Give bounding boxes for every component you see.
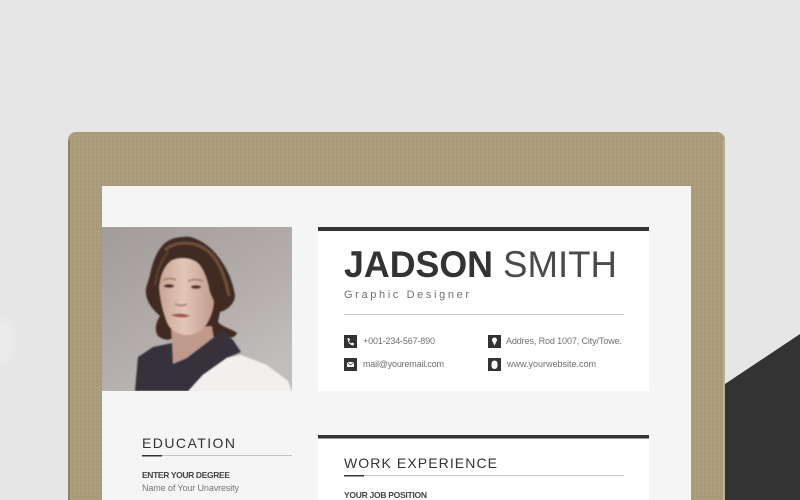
name [344, 243, 617, 285]
name: JADSON [344, 243, 493, 285]
header card [318, 227, 649, 391]
university: Name of Your Unavresity [142, 483, 240, 493]
scarf [135, 330, 241, 391]
eyes, nose and mouth [163, 278, 203, 317]
contact: email: mail@youremail.com [363, 359, 444, 369]
face [159, 258, 214, 335]
contact: address: Addres, Rod 1007, City/Towe. [506, 336, 622, 346]
work experience card [318, 435, 649, 500]
resume mockup scene [68, 132, 800, 500]
education section [142, 435, 292, 493]
neck [171, 326, 214, 364]
contact: address [488, 335, 622, 348]
shirt [188, 355, 292, 392]
resume paper [102, 186, 691, 500]
job title: Graphic Designer [344, 289, 469, 301]
contact: website [488, 358, 596, 371]
board [68, 132, 725, 500]
job position: YOUR JOB POSITION [344, 490, 427, 500]
portrait photo [102, 227, 292, 392]
hair [146, 237, 237, 340]
contact: email [344, 358, 444, 371]
contact: website: www.yourwebsite.com [506, 359, 596, 369]
contact: phone [344, 335, 435, 348]
education heading: EDUCATION [142, 435, 235, 451]
degree: ENTER YOUR DEGREE [142, 470, 230, 480]
faint left glow [0, 320, 14, 364]
name: SMITH [503, 243, 617, 285]
contact: phone: +001-234-567-890 [363, 336, 435, 346]
dark corner shape [725, 334, 800, 500]
work heading: WORK EXPERIENCE [344, 455, 497, 471]
